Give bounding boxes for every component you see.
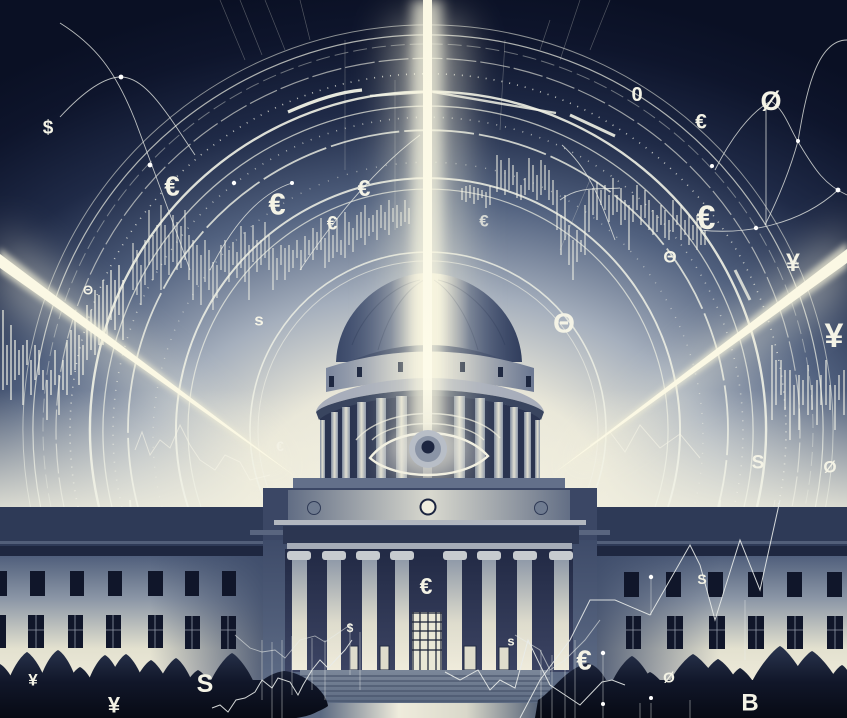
building: wings <box>0 507 847 691</box>
currency symbols: Θ <box>83 282 93 298</box>
currency symbols: € <box>697 199 716 237</box>
stock chart: right <box>462 155 705 280</box>
currency symbols: s <box>254 310 264 330</box>
currency symbols: Θ <box>553 308 575 338</box>
stock chart: faint lower left <box>135 425 700 480</box>
currency symbols: € <box>276 438 284 454</box>
currency symbols: s <box>507 634 515 648</box>
rotunda colonnade <box>316 378 544 480</box>
currency symbols: $ <box>43 118 54 138</box>
currency symbols: € <box>695 110 707 134</box>
hedge trees: left <box>0 650 328 718</box>
currency symbols: € <box>479 212 489 230</box>
building: central block <box>250 478 610 718</box>
stock chart: far left edge <box>3 265 123 420</box>
currency symbols: € <box>268 186 286 222</box>
hedge trees: right <box>535 646 847 718</box>
all-seeing eye <box>356 413 500 475</box>
building: windows <box>0 571 843 649</box>
currency symbols: S <box>697 571 707 587</box>
building: main door <box>412 612 442 670</box>
ground chart: left <box>212 625 360 718</box>
rotunda dome <box>331 273 527 380</box>
stock chart: left <box>133 200 409 310</box>
currency symbols: € <box>576 644 592 676</box>
currency symbols: ¥ <box>786 249 800 277</box>
building: portico with columns <box>285 549 573 672</box>
plaza <box>320 703 545 718</box>
light beam: left diagonal <box>0 225 300 482</box>
currency symbols: S <box>197 670 213 698</box>
building: side doors <box>350 646 509 670</box>
currency symbols: Ø <box>823 458 837 476</box>
light beam: right diagonal <box>553 220 847 482</box>
ground chart: right <box>445 500 780 718</box>
currency symbols: ¥ <box>108 692 121 718</box>
currency symbols: $ <box>347 621 354 635</box>
thin trend curves with nodes <box>60 23 847 270</box>
currency symbols: € <box>164 170 180 202</box>
rotunda drum <box>326 352 534 392</box>
currency symbols: Ø <box>663 670 675 686</box>
currency symbols: Θ <box>663 248 677 266</box>
currency symbols: ¥ <box>825 317 844 355</box>
entrance steps <box>300 670 550 706</box>
currency symbols: € <box>358 175 371 201</box>
central light beam <box>392 0 464 490</box>
currency symbols: B <box>741 690 759 716</box>
currency symbols: 0 <box>631 84 643 106</box>
currency symbols: ¥ <box>28 670 38 690</box>
currency symbols: € <box>420 573 433 599</box>
currency symbols: € <box>327 214 338 234</box>
stock chart: far right edge <box>772 345 844 440</box>
currency symbols: S <box>752 452 764 474</box>
currency symbols: Ø <box>760 86 782 116</box>
